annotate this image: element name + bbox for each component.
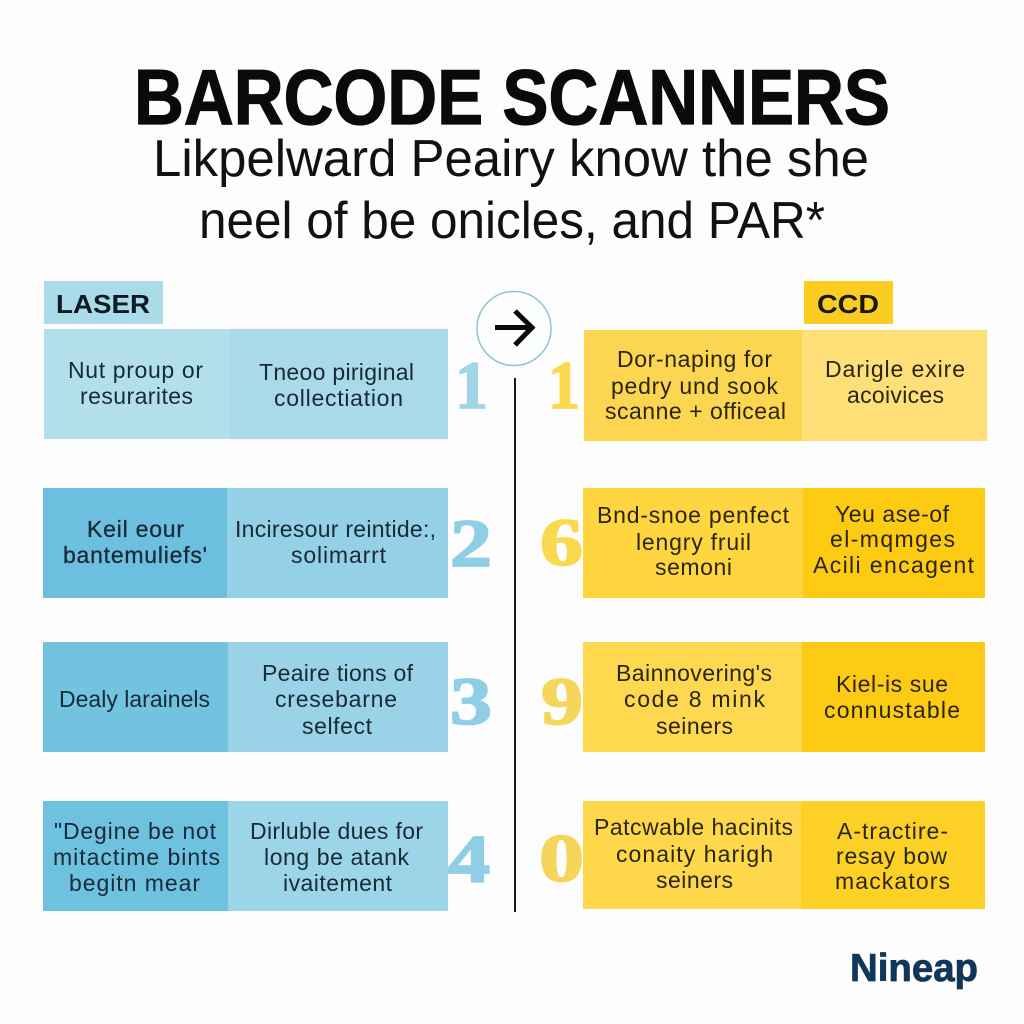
label: LASER bbox=[44, 281, 163, 324]
text: laser row 4 right: ivaitement bbox=[283, 870, 393, 896]
label: LASER: LASER bbox=[56, 289, 150, 319]
text: ccd row 4 left: conaity harigh bbox=[616, 841, 773, 867]
number: laser 4: 4 bbox=[448, 821, 490, 897]
text: ccd row 2 right: el-mqmges bbox=[830, 526, 955, 552]
panel: ccd row 4 bbox=[583, 801, 985, 909]
text: laser row 1 right: collectiation bbox=[274, 385, 403, 411]
number: ccd 0: 0 bbox=[539, 820, 584, 896]
text: ccd row 3 right: Kiel-is sue bbox=[836, 671, 948, 697]
number: laser 2: 2 bbox=[450, 505, 492, 581]
text: ccd row 1 left: pedry und sook bbox=[611, 373, 778, 399]
text: ccd row 1 left: Dor-naping for bbox=[617, 346, 772, 372]
text: laser row 3 right bbox=[262, 660, 414, 739]
text: ccd row 3 left: code 8 mink bbox=[624, 686, 766, 712]
text: laser row 4 right: long be atank bbox=[264, 844, 410, 870]
text: laser row 1 left bbox=[68, 357, 203, 409]
number: ccd 1: 1 bbox=[548, 347, 580, 423]
text: laser row 4 left: begitn mear bbox=[69, 870, 200, 896]
text: laser row 2 right: solimarrt bbox=[291, 542, 387, 568]
text: laser row 1 right bbox=[259, 359, 414, 411]
number: ccd 6: 6 bbox=[540, 504, 583, 580]
text: ccd row 1 left bbox=[605, 346, 786, 424]
text: laser row 2 left: bantemuliefs' bbox=[63, 542, 207, 568]
subtitle: Likpelward Peairy know the she bbox=[153, 130, 869, 188]
panel: laser row 3 bbox=[43, 642, 448, 752]
text: ccd row 1 right: Darigle exire bbox=[825, 356, 965, 382]
text: laser row 3 right: selfect bbox=[302, 713, 373, 739]
panel: ccd row 2 bbox=[583, 488, 985, 598]
label: CCD: CCD bbox=[817, 289, 879, 319]
subtitle: neel of be onicles, and PAR* bbox=[199, 192, 825, 250]
text: ccd row 4 left: Patcwable hacinits bbox=[594, 814, 793, 840]
logo: Nineap: Nineap bbox=[850, 947, 978, 990]
text: laser row 3 left: Dealy larainels bbox=[59, 686, 210, 712]
text: laser row 2 left bbox=[63, 516, 207, 568]
text: laser row 3 right: cresebarne bbox=[275, 686, 397, 712]
text: ccd row 3 left: Bainnovering's bbox=[616, 660, 772, 686]
text: laser row 4 right bbox=[250, 818, 423, 896]
text: laser row 4 right: Dirluble dues for bbox=[250, 818, 423, 844]
text: ccd row 2 right bbox=[813, 501, 975, 578]
text: ccd row 4 right: mackators bbox=[835, 868, 950, 894]
text: ccd row 4 left: seiners bbox=[656, 867, 733, 893]
number: ccd 9: 9 bbox=[541, 663, 583, 739]
text: ccd row 2 left bbox=[597, 502, 790, 580]
text: ccd row 3 left: seiners bbox=[656, 713, 733, 739]
text: ccd row 1 right bbox=[825, 356, 965, 408]
text: laser row 1 left: Nut proup or bbox=[68, 357, 203, 383]
text: laser row 4 left: "Degine be not bbox=[54, 818, 217, 844]
panel: ccd row 3 bbox=[583, 642, 985, 752]
text: ccd row 4 right: A-tractire- bbox=[837, 818, 948, 844]
text: ccd row 4 left bbox=[594, 814, 793, 893]
subtitle bbox=[153, 130, 869, 250]
panel: ccd row 1 bbox=[584, 330, 987, 441]
label: CCD bbox=[804, 281, 893, 324]
text: ccd row 4 right bbox=[835, 818, 950, 894]
text: ccd row 3 right bbox=[824, 671, 960, 723]
text: laser row 2 left: Keil eour bbox=[87, 516, 184, 542]
title: BARCODE SCANNERS bbox=[134, 53, 890, 141]
icon: arrow in circle bbox=[477, 292, 551, 366]
text: ccd row 2 left: lengry fruil bbox=[636, 529, 751, 555]
text: laser row 4 left bbox=[53, 818, 220, 896]
text: laser row 2 right: Inciresour reintide:, bbox=[235, 516, 436, 542]
center divider line bbox=[514, 378, 516, 912]
number: laser 3: 3 bbox=[450, 663, 492, 739]
text: ccd row 4 right: resay bow bbox=[836, 843, 947, 869]
text: ccd row 2 left: Bnd-snoe penfect bbox=[597, 502, 790, 528]
text: ccd row 3 right: connustable bbox=[824, 697, 960, 723]
text: laser row 2 right bbox=[235, 516, 436, 568]
text: laser row 1 left: resurarites bbox=[80, 383, 193, 409]
text: ccd row 1 right: acoivices bbox=[847, 382, 944, 408]
number: laser 1: 1 bbox=[455, 347, 488, 423]
panel: laser row 4 bbox=[43, 801, 448, 911]
text: ccd row 3 left bbox=[616, 660, 772, 739]
text: ccd row 2 left: semoni bbox=[655, 554, 732, 580]
panel: laser row 2 bbox=[43, 488, 448, 598]
panel: laser row 1 bbox=[44, 329, 448, 439]
text: ccd row 2 right: Acili encagent bbox=[813, 552, 975, 578]
text: laser row 4 left: mitactime bints bbox=[53, 844, 220, 870]
text: laser row 1 right: Tneoo piriginal bbox=[259, 359, 414, 385]
text: ccd row 2 right: Yeu ase-of bbox=[835, 501, 950, 527]
text: ccd row 1 left: scanne + officeal bbox=[605, 398, 786, 424]
text: laser row 3 right: Peaire tions of bbox=[262, 660, 414, 686]
